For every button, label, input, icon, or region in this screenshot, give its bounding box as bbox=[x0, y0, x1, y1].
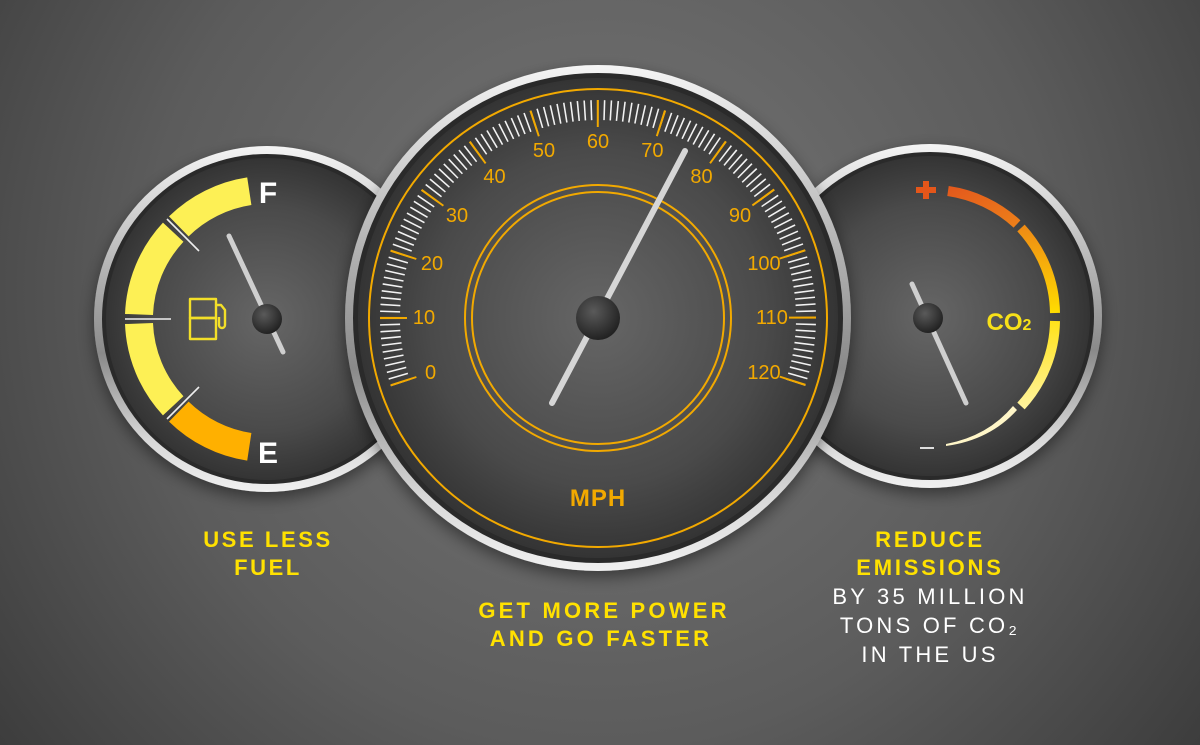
needle: co2 bbox=[912, 284, 966, 403]
caption: use less fuel: FUEL bbox=[234, 555, 302, 580]
speed labels: 110 bbox=[756, 307, 788, 329]
needle: speed bbox=[552, 151, 685, 403]
fuel separators bbox=[125, 219, 199, 419]
caption: more power: AND GO FASTER bbox=[490, 626, 712, 651]
co2 tail bbox=[946, 406, 1017, 446]
speed labels: 100 bbox=[747, 253, 781, 275]
caption: reduce emissions: TONS OF CO₂ bbox=[840, 613, 1020, 638]
caption: reduce emissions bbox=[832, 527, 1028, 667]
icon: fuel pump bbox=[190, 299, 225, 339]
speed labels: 50 bbox=[533, 140, 555, 162]
caption: reduce emissions: EMISSIONS bbox=[856, 555, 1004, 580]
needle: fuel bbox=[229, 236, 283, 352]
caption: reduce emissions: REDUCE bbox=[875, 527, 985, 552]
gauge: fuel (left) bbox=[94, 146, 440, 492]
gauge: speedometer (center) bbox=[345, 65, 851, 571]
caption: reduce emissions: BY 35 MILLION bbox=[832, 584, 1028, 609]
major ticks bbox=[393, 113, 802, 411]
label F: F bbox=[259, 177, 277, 210]
plus sign bbox=[916, 181, 936, 199]
caption: use less fuel: USE LESS bbox=[203, 527, 333, 552]
fuel level arc bbox=[139, 191, 249, 447]
speed labels: 10 bbox=[413, 307, 435, 329]
speed labels bbox=[413, 131, 788, 384]
label CO2: CO2 bbox=[987, 309, 1032, 336]
speed labels: 120 bbox=[747, 362, 781, 384]
speed labels: 60 bbox=[587, 131, 609, 153]
label E: E bbox=[258, 437, 278, 470]
speed labels: 20 bbox=[421, 253, 443, 275]
speed labels: 90 bbox=[729, 205, 751, 227]
inner rings bbox=[465, 185, 731, 451]
label MPH: MPH bbox=[570, 485, 626, 512]
minus sign bbox=[920, 447, 934, 449]
caption: reduce emissions: IN THE US bbox=[861, 642, 999, 667]
minor ticks bbox=[390, 110, 806, 385]
caption: more power: GET MORE POWER bbox=[478, 598, 730, 623]
speed labels: 0 bbox=[425, 362, 436, 384]
co2 arc bbox=[948, 191, 1055, 406]
speed labels: 40 bbox=[483, 166, 506, 188]
speed labels: 30 bbox=[446, 205, 468, 227]
speed labels: 80 bbox=[690, 166, 713, 188]
speed labels: 70 bbox=[641, 140, 664, 162]
gauge: CO2 (right) bbox=[758, 144, 1102, 488]
